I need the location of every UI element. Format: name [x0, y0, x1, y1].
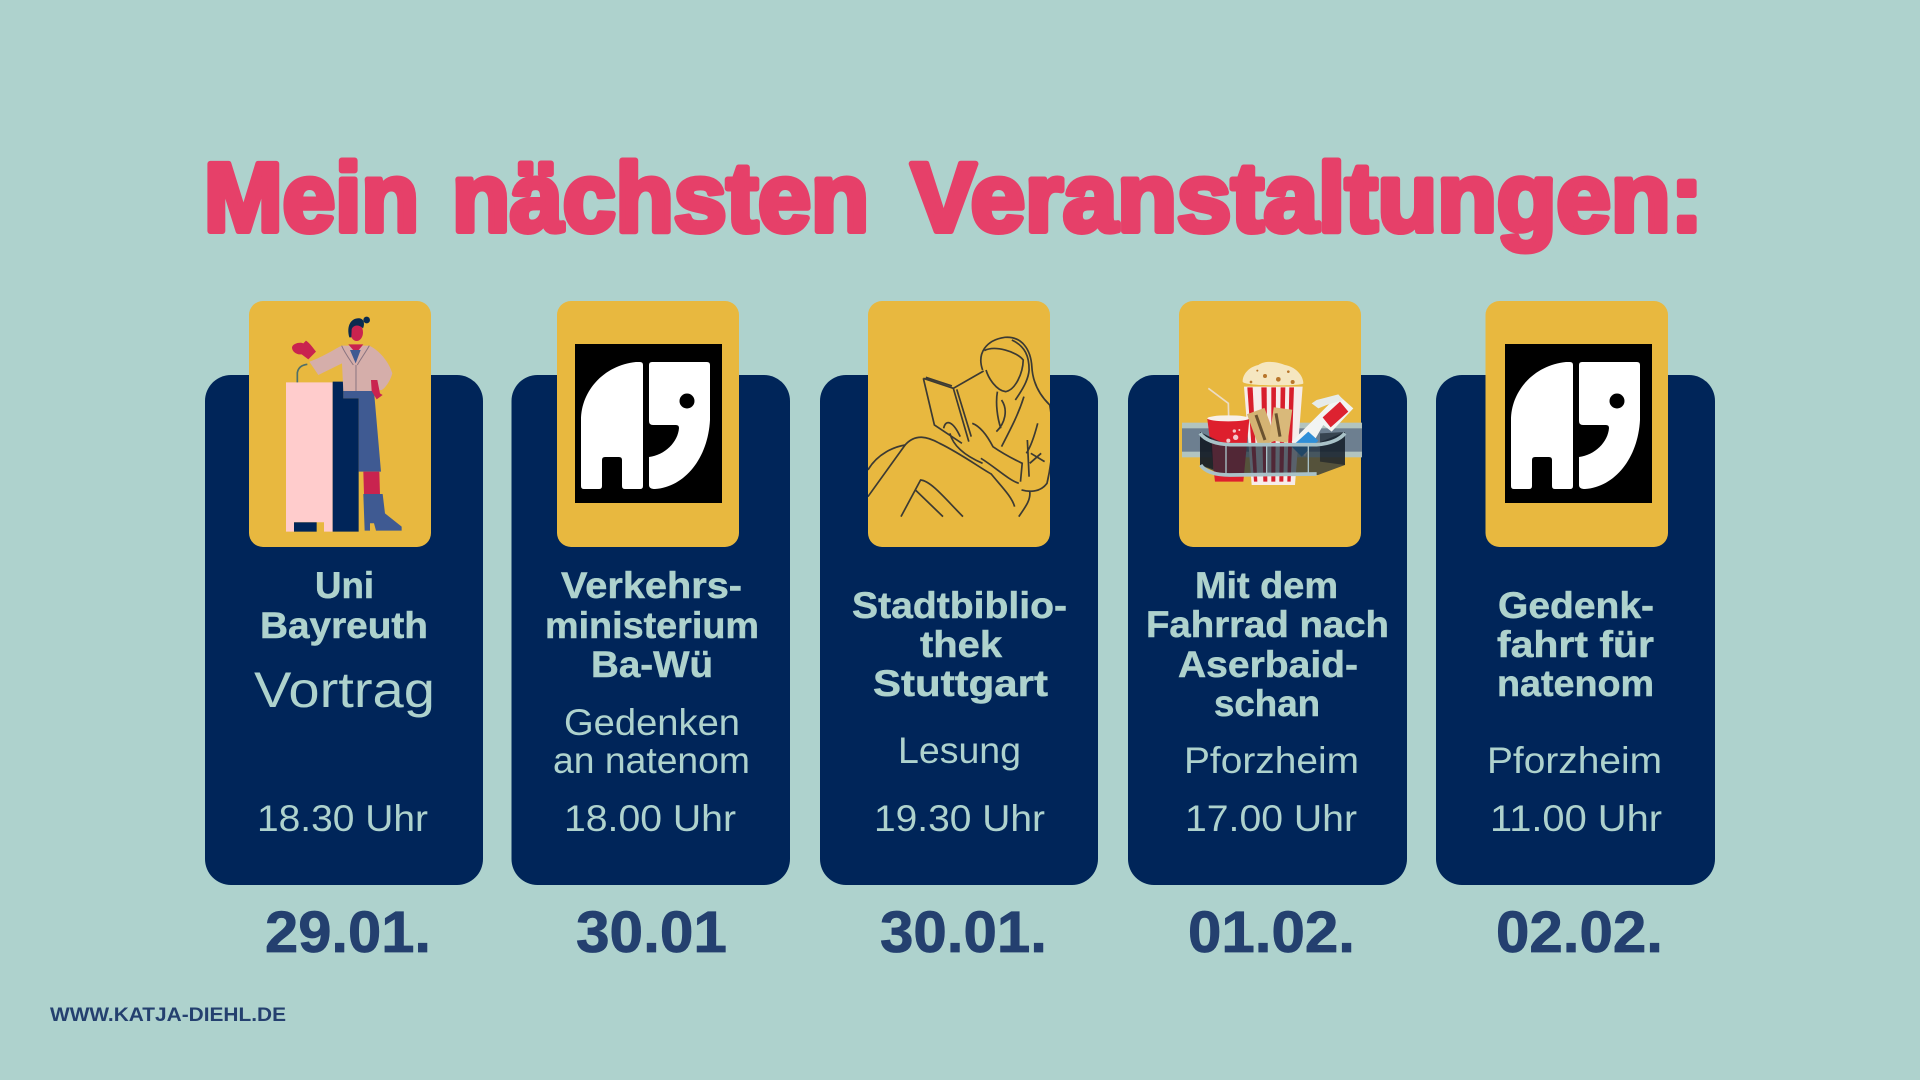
heading: [1146, 565, 1389, 724]
image tile: [868, 301, 1050, 547]
heading: Aserbaid-: [1178, 644, 1358, 685]
heading: [852, 585, 1067, 704]
image tile: [557, 301, 739, 547]
heading: Stadtbiblio-: [852, 585, 1067, 626]
title: Mein: [204, 143, 419, 252]
icon: cinema film, popcorn, cup, tickets, glasses: [1182, 362, 1362, 485]
website url: WWW.KATJA-DIEHL.DE: [50, 1005, 286, 1026]
date: 30.01: [576, 900, 727, 965]
time: 18.30 Uhr: [257, 798, 428, 839]
panel: Verkehrsministerium: [512, 301, 790, 885]
card background: [1436, 375, 1715, 885]
image tile: [1486, 301, 1668, 547]
heading: schan: [1214, 683, 1320, 724]
heading: Gedenk-: [1498, 585, 1654, 626]
event type: Gedenken: [564, 702, 740, 743]
heading: Bayreuth: [260, 605, 428, 646]
heading: natenom: [1497, 663, 1654, 704]
title: nächsten: [452, 143, 869, 252]
panel: Mit dem Fahrrad nach Aserbaidschan: [1128, 301, 1407, 885]
panel: Stadtbibliothek Stuttgart: [820, 301, 1098, 885]
icon: speaker at lectern: [286, 317, 402, 532]
heading: Ba-Wü: [591, 644, 713, 685]
event type: Lesung: [898, 730, 1021, 771]
date: 30.01.: [880, 900, 1047, 965]
heading: Verkehrs-: [561, 565, 742, 606]
heading: Mit dem: [1195, 565, 1338, 606]
heading: thek: [920, 624, 1002, 665]
icon: elephant logo: [575, 344, 722, 503]
card background: [205, 375, 483, 885]
card background: [1128, 375, 1407, 885]
card background: [512, 375, 790, 885]
event type: [553, 702, 750, 781]
icon: woman reading: [868, 337, 1052, 517]
event type: Vortrag: [254, 662, 435, 718]
event type: Pforzheim: [1184, 740, 1359, 781]
image tile: [1179, 301, 1361, 547]
date: 02.02.: [1496, 900, 1663, 965]
event type: an natenom: [553, 740, 750, 781]
heading: Fahrrad nach: [1146, 604, 1389, 645]
heading: Stuttgart: [873, 663, 1048, 704]
panel: Uni Bayreuth: [205, 301, 483, 885]
icon: elephant logo: [1505, 344, 1652, 503]
panel: Gedenkfahrt für natenom: [1436, 301, 1715, 885]
image tile: [249, 301, 431, 547]
heading: [545, 565, 759, 685]
heading: [260, 565, 428, 646]
heading: [1497, 585, 1654, 704]
heading: Uni: [315, 565, 374, 606]
time: 19.30 Uhr: [874, 798, 1045, 839]
heading: ministerium: [545, 605, 759, 646]
event type: Pforzheim: [1487, 740, 1662, 781]
heading: fahrt für: [1497, 624, 1654, 665]
title: Veranstaltungen:: [911, 143, 1703, 252]
time: 18.00 Uhr: [564, 798, 736, 839]
time: 11.00 Uhr: [1490, 798, 1662, 839]
date: 29.01.: [265, 900, 431, 965]
title: [204, 143, 1703, 252]
date: 01.02.: [1188, 900, 1355, 965]
card background: [820, 375, 1098, 885]
time: 17.00 Uhr: [1185, 798, 1357, 839]
